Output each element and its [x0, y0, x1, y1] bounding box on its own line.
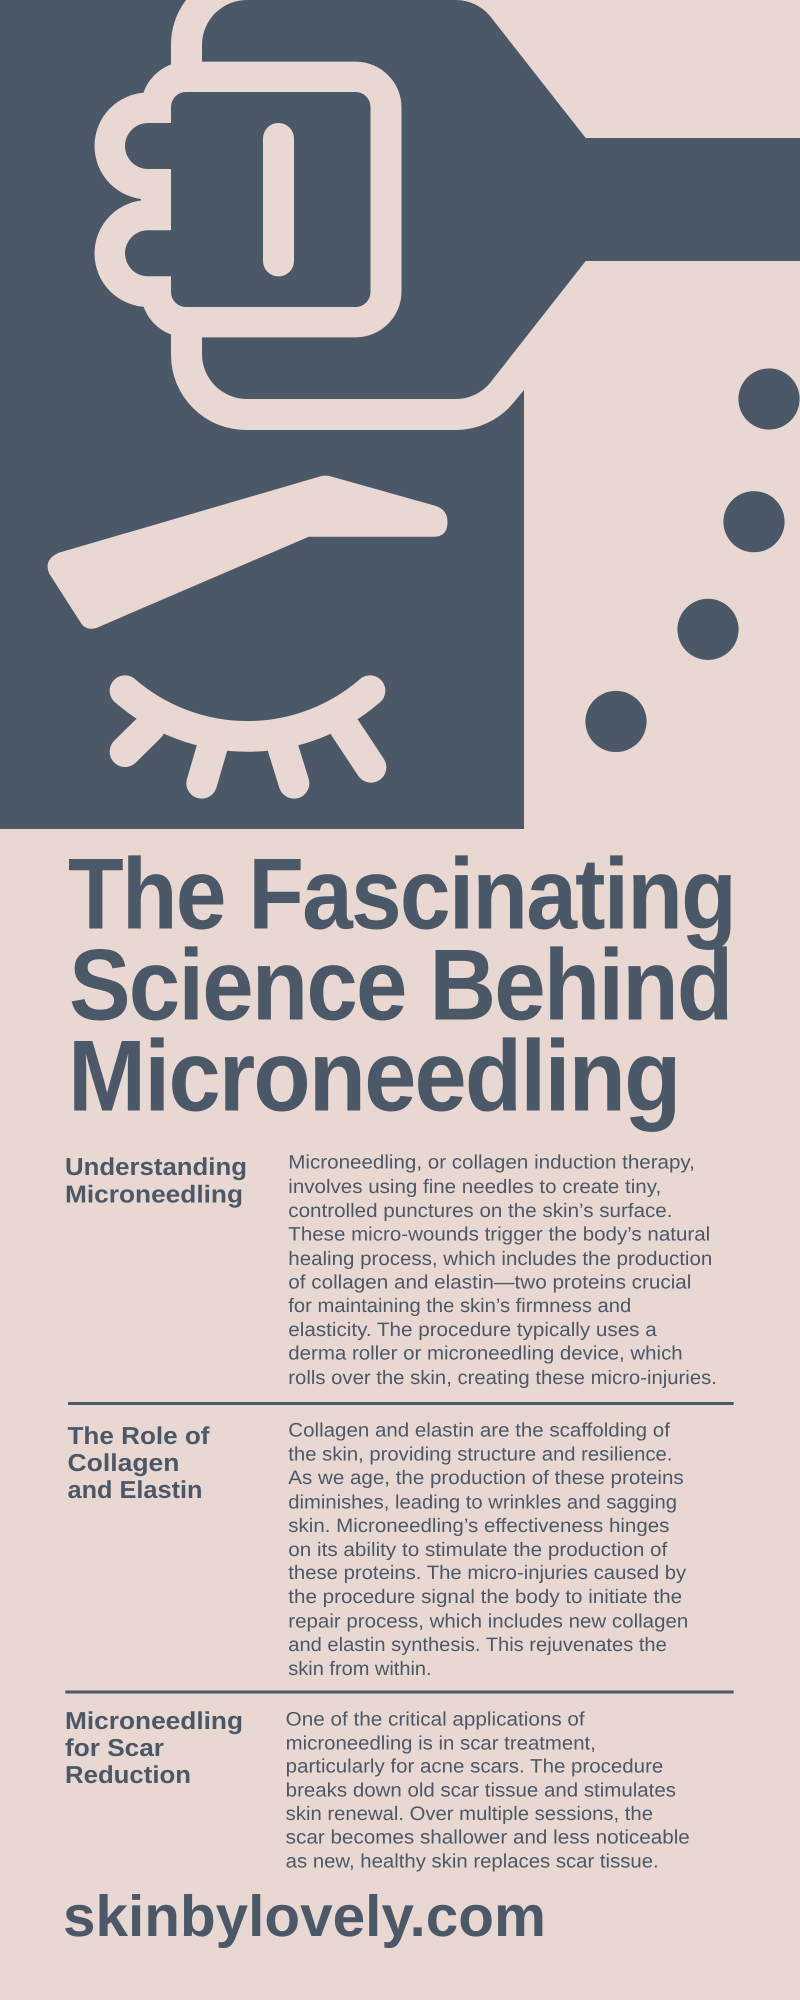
text block: microneedling for scar reduction: breaks down old scar tissue and stimulates — [286, 1780, 676, 1802]
text block: understanding microneedling — [288, 1152, 717, 1389]
text block: understanding microneedling: involves using fine needles to create tiny, — [288, 1176, 661, 1198]
text block: the role of collagen and elastin: on its ability to stimulate the production of — [288, 1539, 668, 1561]
text block: the role of collagen and elastin: skin from within. — [288, 1658, 432, 1680]
text block: the role of collagen and elastin — [288, 1419, 688, 1680]
title: Microneedling — [68, 1020, 680, 1132]
text block: understanding microneedling: healing process, which includes the production — [288, 1248, 712, 1270]
text block: understanding microneedling: derma roller or microneedling device, which — [288, 1343, 683, 1365]
heading: understanding microneedling: Microneedling — [65, 1182, 243, 1209]
text block: understanding microneedling: elasticity. The procedure typically uses a — [288, 1319, 657, 1341]
icon: closed eye with lashes — [125, 691, 371, 783]
text block: understanding microneedling: These micro-wounds trigger the body’s natural — [288, 1224, 710, 1246]
text block: microneedling for scar reduction: particularly for acne scars. The procedure — [286, 1755, 663, 1777]
icon: eyebrow — [48, 476, 447, 629]
text block: the role of collagen and elastin: Collagen and elastin are the scaffolding of — [288, 1419, 671, 1441]
heading: microneedling for scar reduction: Microneedling — [65, 1708, 243, 1735]
heading: microneedling for scar reduction — [65, 1708, 243, 1789]
text block: understanding microneedling: controlled punctures on the skin’s surface. — [288, 1200, 672, 1222]
text block: microneedling for scar reduction — [286, 1708, 690, 1872]
text block: microneedling for scar reduction: as new, healthy skin replaces scar tissue. — [286, 1850, 659, 1872]
website url: skinbylovely.com — [63, 1884, 546, 1949]
text block: microneedling for scar reduction: One of the critical applications of — [286, 1708, 585, 1730]
heading: microneedling for scar reduction: Reduction — [65, 1762, 191, 1789]
text block: the role of collagen and elastin: and elastin synthesis. This rejuvenates the — [288, 1634, 667, 1656]
heading: the role of collagen and elastin — [68, 1423, 210, 1504]
icon: falling dots — [585, 368, 800, 752]
text block: the role of collagen and elastin: the skin, providing structure and resilience. — [288, 1444, 672, 1466]
text block: microneedling for scar reduction: microneedling is in scar treatment, — [286, 1732, 596, 1754]
text block: understanding microneedling: for maintaining the skin’s firmness and — [288, 1295, 631, 1317]
title: The Fascinating — [68, 838, 735, 950]
heading: the role of collagen and elastin: Collagen — [68, 1450, 180, 1477]
text block: understanding microneedling: rolls over the skin, creating these micro-injuries. — [288, 1367, 717, 1389]
title: Science Behind — [69, 929, 732, 1041]
text block: the role of collagen and elastin: diminishes, leading to wrinkles and sagging — [288, 1491, 677, 1513]
text block: the role of collagen and elastin: these proteins. The micro-injuries caused by — [288, 1562, 686, 1584]
heading: the role of collagen and elastin: The Role of — [68, 1423, 210, 1450]
title — [68, 838, 735, 1132]
icon: derma roller — [94, 0, 800, 430]
panel: dark illustration block — [0, 0, 524, 829]
text block: the role of collagen and elastin: repair process, which includes new collagen — [288, 1610, 688, 1632]
heading: the role of collagen and elastin: and Elastin — [68, 1477, 202, 1504]
text block: microneedling for scar reduction: scar becomes shallower and less noticeable — [286, 1827, 690, 1849]
text block: the role of collagen and elastin: the procedure signal the body to initiate the — [288, 1586, 682, 1608]
text block: the role of collagen and elastin: skin. Microneedling’s effectiveness hinges — [288, 1515, 670, 1537]
text block: microneedling for scar reduction: skin renewal. Over multiple sessions, the — [286, 1803, 653, 1825]
heading: understanding microneedling: Understanding — [65, 1154, 247, 1181]
heading: microneedling for scar reduction: for Scar — [65, 1735, 164, 1762]
text block: understanding microneedling: Microneedling, or collagen induction therapy, — [288, 1152, 695, 1174]
text block: the role of collagen and elastin: As we age, the production of these proteins — [288, 1467, 684, 1489]
heading: understanding microneedling — [65, 1154, 247, 1209]
text block: understanding microneedling: of collagen and elastin—two proteins crucial — [288, 1272, 691, 1294]
